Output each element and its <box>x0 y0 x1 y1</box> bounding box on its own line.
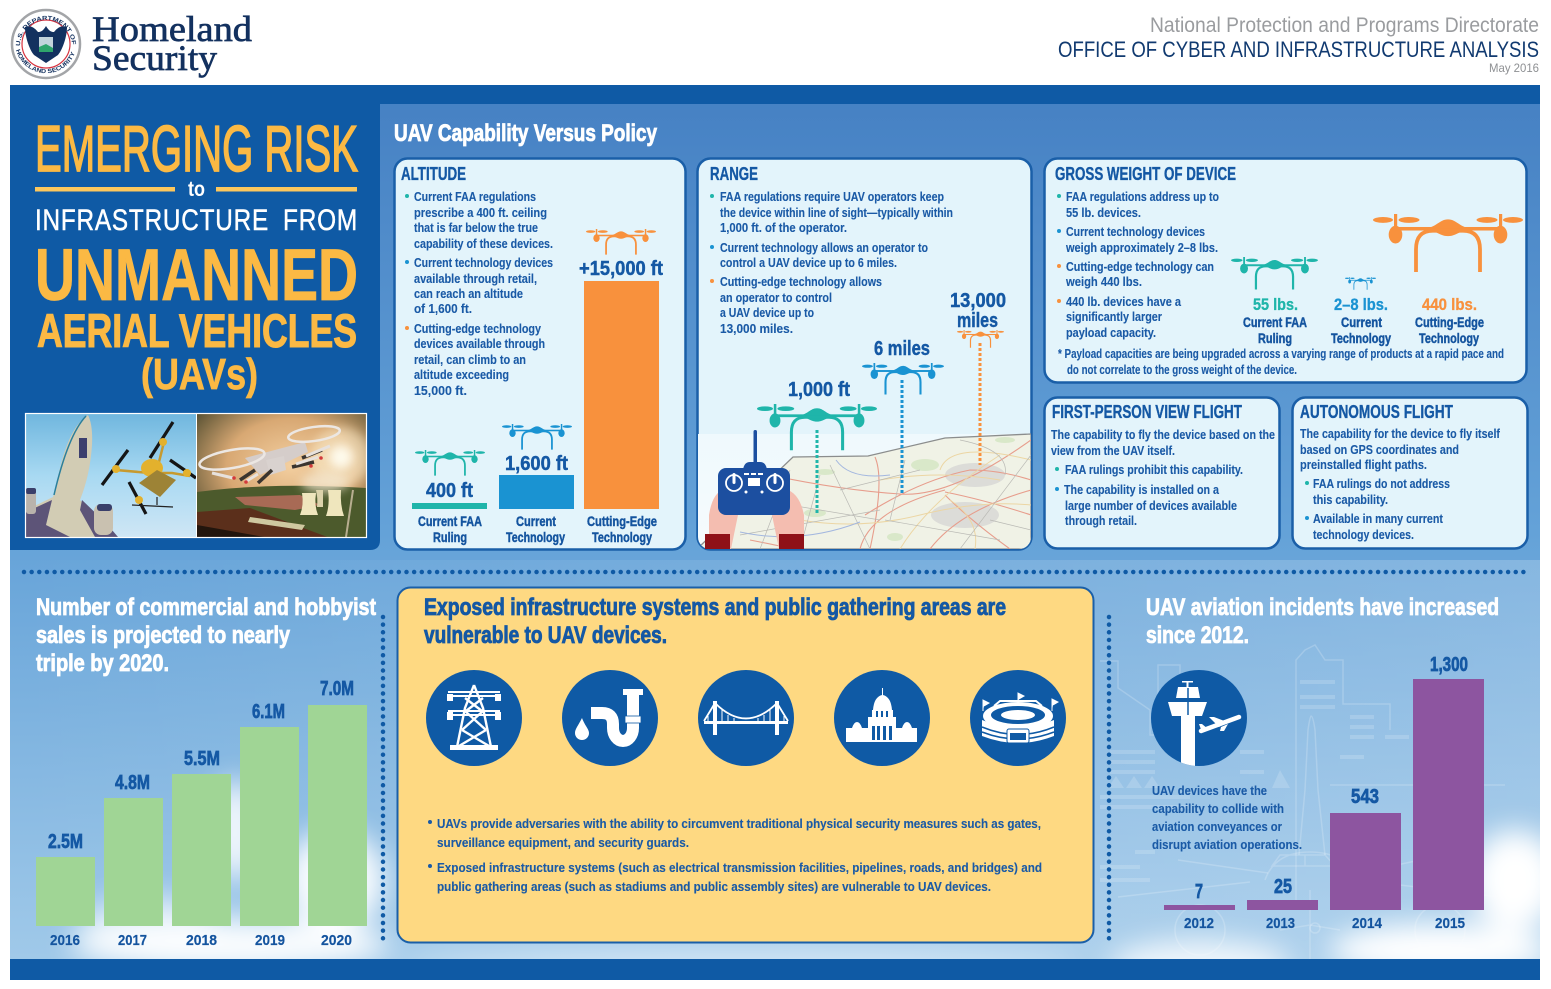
range text: Cutting-edge technology allows <box>720 274 882 289</box>
altitude text: devices available through <box>414 336 545 351</box>
altitude bar chart: Technology <box>592 530 652 545</box>
weight comparison: Current <box>1341 315 1382 330</box>
altitude text: of 1,600 ft. <box>414 301 472 316</box>
infrastructure heading: Exposed infrastructure systems and public gathering areas are <box>424 594 1006 621</box>
bottom band <box>10 959 1540 980</box>
panel: altitude: ALTITUDE <box>401 164 466 184</box>
range text: the device within line of sight—typically within <box>720 205 953 220</box>
header: directorate and office <box>1058 14 1539 75</box>
title: (UAVs) <box>141 350 258 399</box>
altitude bar chart: +15,000 ft <box>579 258 663 280</box>
weight comparison: Ruling <box>1258 331 1292 346</box>
sales bar chart <box>36 678 367 949</box>
icon: stadium <box>970 670 1066 766</box>
photo: drone over power plant <box>197 413 371 538</box>
panel: autonomous flight: this capability. <box>1313 492 1388 507</box>
header: directorate and office: May 2016 <box>1489 61 1539 75</box>
panel: gross weight of device: GROSS WEIGHT OF DEVICE <box>1055 164 1236 184</box>
incidents bar chart: 2012 <box>1184 916 1214 932</box>
altitude text: prescribe a 400 ft. ceiling <box>414 205 547 220</box>
title panel <box>10 85 380 550</box>
incidents text: aviation conveyances or <box>1152 819 1282 834</box>
photo: plane and delivery drone <box>25 413 197 538</box>
incidents bar chart <box>1164 654 1484 932</box>
sales heading <box>36 594 376 677</box>
icon: hands and remote controller <box>705 430 804 549</box>
panel: aviation incidents <box>1146 594 1499 932</box>
gross weight text: Current technology devices <box>1066 224 1205 239</box>
weight comparison: Current FAA <box>1243 315 1307 330</box>
infrastructure heading: vulnerable to UAV devices. <box>424 622 667 649</box>
panel: range <box>698 158 1032 550</box>
panel: autonomous flight: The capability for the device to fly itself <box>1300 426 1501 441</box>
range text: 13,000 miles. <box>720 321 793 336</box>
infrastructure text: public gathering areas (such as stadiums and public assembly sites) are vulnerable to UAV devices. <box>437 879 991 894</box>
range text <box>710 189 953 336</box>
weight comparison: Cutting-Edge <box>1415 315 1484 330</box>
icon: suspension bridge <box>698 670 794 766</box>
header: DHS seal: U.S. DEPARTMENT OF <box>16 16 76 46</box>
incidents heading: since 2012. <box>1146 622 1249 649</box>
incidents bar chart: 7 <box>1195 881 1203 903</box>
panel: first-person view flight: The capability is installed on a <box>1064 482 1220 497</box>
weight comparison <box>1231 214 1523 346</box>
sales bar chart: 2017 <box>118 933 147 949</box>
gross weight text: 55 lb. devices. <box>1066 205 1141 220</box>
top band <box>10 85 1540 104</box>
weight comparison: 55 lbs. <box>1253 295 1298 314</box>
altitude bar chart: 1,600 ft <box>505 453 568 475</box>
panel: autonomous flight <box>1292 398 1528 548</box>
altitude bar chart: Current FAA <box>418 514 482 529</box>
altitude bar chart: Ruling <box>433 530 467 545</box>
header: DHS seal: HOMELAND SECURITY <box>16 49 74 74</box>
altitude bar chart: Cutting-Edge <box>587 514 657 529</box>
title: FROM <box>283 204 358 237</box>
altitude text: 15,000 ft. <box>414 383 467 398</box>
altitude bar chart: Technology <box>506 530 565 545</box>
weight comparison: 440 lbs. <box>1422 295 1477 314</box>
altitude text: Cutting-edge technology <box>414 321 542 336</box>
altitude text: available through retail, <box>414 271 537 286</box>
infrastructure text: surveillance equipment, and security guards. <box>437 835 689 850</box>
range text: a UAV device up to <box>720 305 814 320</box>
footnote: do not correlate to the gross weight of the device. <box>1067 362 1297 377</box>
title: UNMANNED <box>35 235 358 316</box>
header: Homeland Security wordmark <box>92 9 252 78</box>
incidents bar chart: 1,300 <box>1430 654 1468 676</box>
panel: altitude <box>394 158 686 550</box>
altitude text: Current FAA regulations <box>414 189 536 204</box>
incidents text: disrupt aviation operations. <box>1152 837 1302 852</box>
incidents bar chart: 2014 <box>1352 916 1382 932</box>
sales heading: sales is projected to nearly <box>36 622 291 649</box>
sales heading: Number of commercial and hobbyist <box>36 594 376 621</box>
gross weight text: significantly larger <box>1066 309 1162 324</box>
map <box>698 434 1031 549</box>
infrastructure text: Exposed infrastructure systems (such as electrical transmission facilities, pipelines, roads, and bridges) and <box>437 860 1042 875</box>
gross weight text: weigh 440 lbs. <box>1065 274 1142 289</box>
section heading: UAV Capability Versus Policy <box>394 120 658 147</box>
panel: sales projection <box>36 594 376 949</box>
panel: autonomous flight: AUTONOMOUS FLIGHT <box>1300 402 1453 422</box>
sales bar chart: 2019 <box>255 933 285 949</box>
infrastructure text <box>428 816 1042 894</box>
weight comparison: Technology <box>1419 331 1479 346</box>
sales bar chart: 7.0M <box>320 678 354 700</box>
panel: first-person view flight <box>1044 398 1280 548</box>
range text: Current technology allows an operator to <box>720 240 928 255</box>
incidents heading <box>1146 594 1499 649</box>
sales bar chart: 4.8M <box>115 772 150 794</box>
panel: autonomous flight: FAA rulings do not address <box>1313 476 1450 491</box>
title <box>35 112 358 399</box>
gross weight text: FAA regulations address up to <box>1066 189 1219 204</box>
title: to <box>188 178 205 201</box>
altitude bar chart: 400 ft <box>426 480 473 502</box>
range drones and distances: 6 miles <box>874 338 930 360</box>
incidents bar chart: 2015 <box>1435 916 1465 932</box>
panel: autonomous flight: Available in many current <box>1313 511 1444 526</box>
incidents text: UAV devices have the <box>1152 783 1267 798</box>
altitude text: altitude exceeding <box>414 367 509 382</box>
panel: autonomous flight: technology devices. <box>1313 527 1414 542</box>
gross weight text: Cutting-edge technology can <box>1066 259 1214 274</box>
altitude bar chart: Current <box>516 514 556 529</box>
range text: FAA regulations require UAV operators keep <box>720 189 944 204</box>
title: INFRASTRUCTURE <box>35 204 269 237</box>
altitude text <box>405 189 553 398</box>
incidents bar chart: 2013 <box>1266 916 1295 932</box>
title: AERIAL VEHICLES <box>37 304 357 357</box>
panel: first-person view flight: FAA rulings prohibit this capability. <box>1065 462 1243 477</box>
panel: autonomous flight: preinstalled flight paths. <box>1300 457 1427 472</box>
header: Homeland Security wordmark: Security <box>92 38 217 78</box>
panel: exposed infrastructure <box>398 588 1094 942</box>
infrastructure text: UAVs provide adversaries with the ability to circumvent traditional physical security measures such as gates, <box>437 816 1041 831</box>
sales bar chart: 2020 <box>321 933 352 949</box>
panel: first-person view flight: The capability to fly the device based on the <box>1051 427 1275 442</box>
sales heading: triple by 2020. <box>36 650 169 677</box>
altitude text: capability of these devices. <box>414 236 553 251</box>
panel: autonomous flight: based on GPS coordinates and <box>1300 442 1459 457</box>
panel: first-person view flight: through retail. <box>1065 513 1137 528</box>
infrastructure heading <box>424 594 1006 649</box>
icon: capitol building <box>834 670 930 766</box>
range drones and distances <box>757 290 1006 515</box>
weight comparison: Technology <box>1331 331 1391 346</box>
sales bar chart: 2.5M <box>48 831 83 853</box>
range text: control a UAV device up to 6 miles. <box>720 255 897 270</box>
gross weight text: weigh approximately 2–8 lbs. <box>1065 240 1218 255</box>
altitude text: that is far below the true <box>414 220 538 235</box>
skyline backdrop <box>1100 645 1505 960</box>
range text: 1,000 ft. of the operator. <box>720 220 847 235</box>
icon: leaking pipe <box>562 670 658 766</box>
panel: gross weight of device <box>1044 158 1526 382</box>
sales bar chart: 2018 <box>186 933 217 949</box>
altitude text: retail, can climb to an <box>414 352 526 367</box>
range text: an operator to control <box>720 290 832 305</box>
range drones and distances: miles <box>957 310 998 332</box>
weight comparison: 2–8 lbs. <box>1334 295 1388 314</box>
range drones and distances: 1,000 ft <box>788 379 850 401</box>
panel: first-person view flight: view from the UAV itself. <box>1051 443 1175 458</box>
incidents text <box>1152 783 1302 852</box>
range drones and distances: 13,000 <box>950 290 1006 312</box>
sales bar chart: 5.5M <box>184 748 220 770</box>
gross weight text: 440 lb. devices have a <box>1066 294 1182 309</box>
gross weight text: payload capacity. <box>1066 325 1156 340</box>
icon: control tower and plane <box>1151 670 1247 766</box>
sales bar chart: 2016 <box>50 933 80 949</box>
footnote <box>1058 346 1504 377</box>
title: EMERGING RISK <box>35 112 358 185</box>
panel: first-person view flight: FIRST-PERSON VIEW FLIGHT <box>1052 402 1242 422</box>
altitude text: Current technology devices <box>414 255 553 270</box>
header: DHS seal <box>10 8 82 80</box>
incidents bar chart: 25 <box>1274 876 1292 898</box>
panel: first-person view flight: large number of devices available <box>1065 498 1237 513</box>
altitude text: can reach an altitude <box>414 286 523 301</box>
header: Homeland Security wordmark: Homeland <box>92 9 252 49</box>
incidents bar chart: 543 <box>1351 786 1379 808</box>
icon: transmission tower <box>426 670 522 766</box>
gross weight text <box>1057 189 1219 340</box>
altitude bar chart <box>412 229 663 545</box>
incidents text: capability to collide with <box>1152 801 1284 816</box>
panel: range: RANGE <box>710 164 758 184</box>
sales bar chart: 6.1M <box>252 701 285 723</box>
